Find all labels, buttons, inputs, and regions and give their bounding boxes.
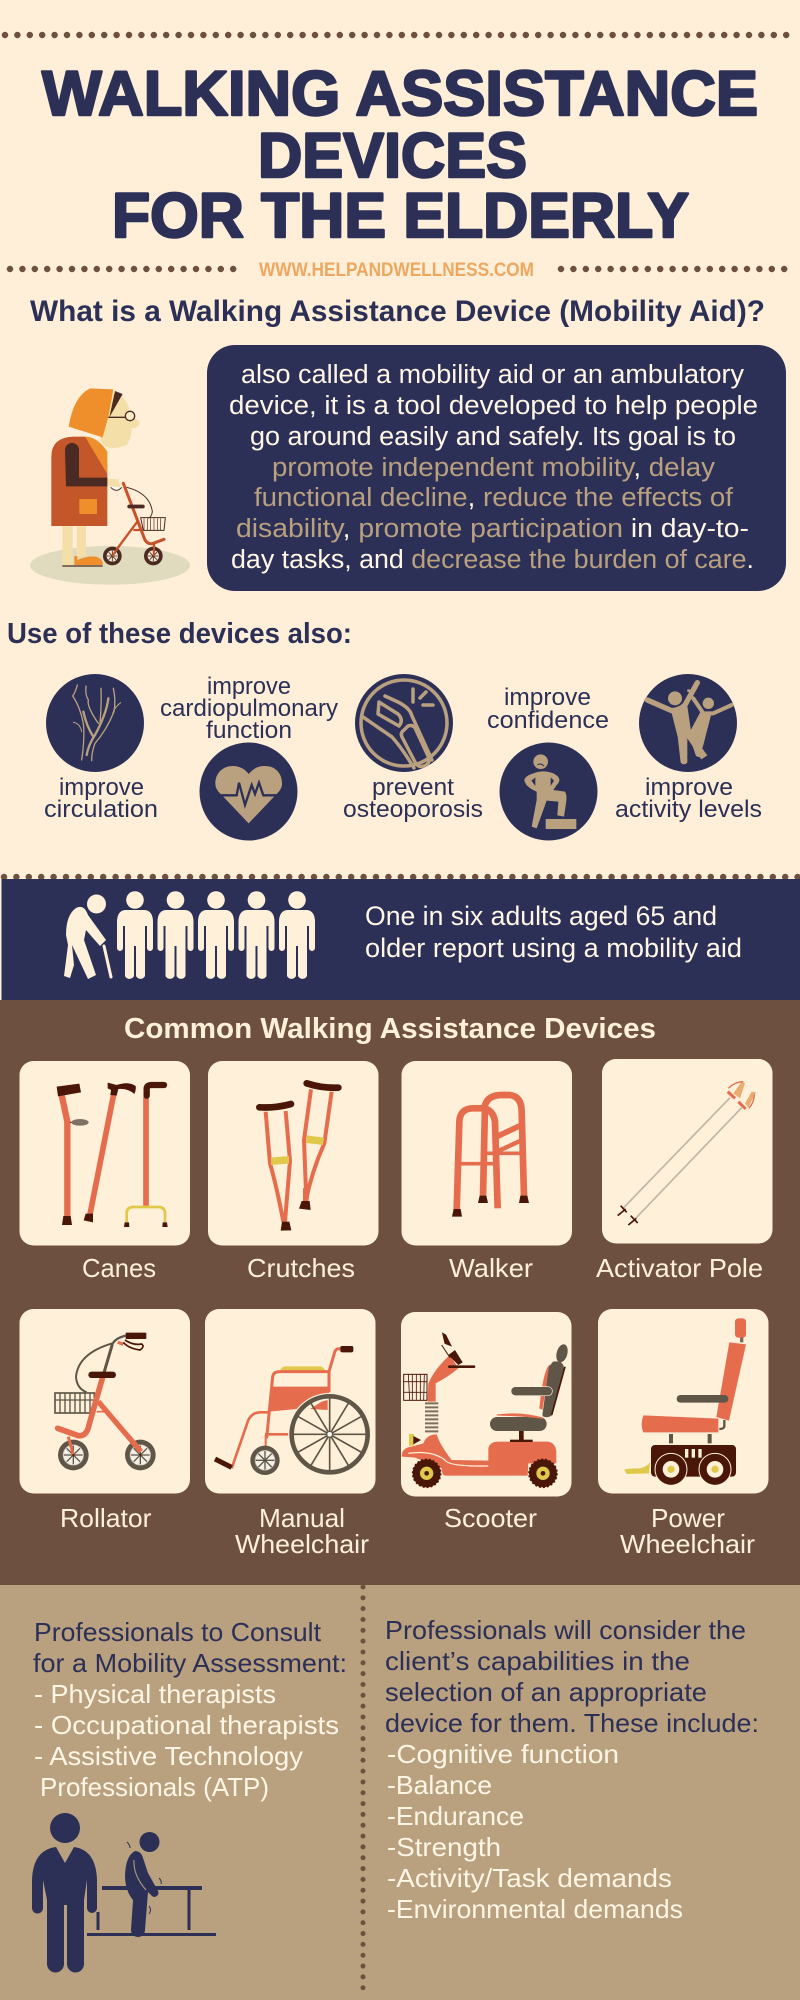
statistic text: [365, 901, 742, 963]
label: improve activity levels: activity levels: [615, 796, 762, 823]
label: power wheelchair: [620, 1503, 755, 1559]
card: canes: [20, 1061, 190, 1246]
card: rollator: [20, 1309, 190, 1494]
text: professionals will consider: -Balance: [387, 1770, 492, 1800]
text: professionals to consult: for a Mobility Assessment:: [33, 1648, 347, 1678]
label: prevent osteoporosis: osteoporosis: [343, 796, 483, 823]
card: scooter: [401, 1312, 572, 1496]
icon: dancing people: [639, 674, 737, 772]
panel: definition: go around easily and safely. Its goal is to: [250, 423, 736, 451]
text: professionals will consider: -Endurance: [387, 1801, 524, 1831]
card: walker: [402, 1061, 572, 1246]
label: activator pole: Activator Pole: [596, 1253, 763, 1283]
label: prevent osteoporosis: [343, 774, 483, 823]
icon: improve circulation: [46, 674, 144, 772]
text: professionals will consider: -Cognitive function: [387, 1739, 619, 1769]
label: improve cardiopulmonary function: cardiopulmonary: [160, 695, 338, 722]
label: improve confidence: improve: [504, 684, 591, 711]
statistic text: older report using a mobility aid: [365, 933, 742, 963]
label: improve circulation: circulation: [44, 796, 158, 823]
label: improve confidence: confidence: [487, 707, 609, 734]
label: crutches: Crutches: [247, 1253, 355, 1283]
illustration: elderly woman with rollator: [30, 388, 190, 585]
statistic text: One in six adults aged 65 and: [365, 901, 717, 931]
title: DEVICES: [258, 121, 527, 191]
label: power wheelchair: Power: [651, 1503, 725, 1533]
text: professionals to consult: - Occupational therapists: [34, 1710, 339, 1740]
text: professionals to consult: - Physical therapists: [34, 1679, 276, 1709]
panel: definition: device, it is a tool developed to help people: [229, 392, 758, 420]
text: professionals to consult: Professionals to Consult: [34, 1617, 322, 1647]
label: improve activity levels: [615, 774, 762, 823]
card: activator pole: [602, 1059, 772, 1244]
panel: definition: disability , promote participation in day-to-: [236, 515, 749, 543]
text: professionals will consider: selection of an appropriate: [385, 1677, 707, 1707]
heading: use of these devices: Use of these devices also:: [7, 618, 352, 650]
heading: common walking assistance devices: Common Walking Assistance Devices: [124, 1013, 656, 1045]
panel: definition: promote independent mobility , delay: [272, 454, 715, 482]
label: power wheelchair: Wheelchair: [620, 1529, 755, 1559]
panel: one in six statistic: [2, 879, 800, 1000]
icon: six people, one with cane: [64, 891, 315, 979]
label: manual wheelchair: [235, 1503, 369, 1559]
label: improve circulation: improve: [59, 774, 144, 801]
label: manual wheelchair: Manual: [259, 1503, 345, 1533]
label: improve cardiopulmonary function: function: [206, 717, 292, 744]
icon: therapist and patient: [32, 1813, 216, 1972]
panel: definition: functional decline , reduce the effects of: [254, 484, 734, 512]
text: professionals will consider: -Activity/Task demands: [387, 1863, 672, 1893]
text: professionals will consider: [385, 1615, 759, 1924]
panel: definition: also called a mobility aid or an ambulatory: [241, 361, 744, 389]
text: professionals will consider: -Strength: [387, 1832, 501, 1862]
label: scooter: Scooter: [444, 1503, 537, 1533]
title: WALKING ASSISTANCE: [42, 59, 758, 129]
text: professionals will consider: -Environmental demands: [387, 1894, 683, 1924]
title: FOR THE ELDERLY: [112, 181, 689, 251]
text: professionals to consult: [33, 1617, 347, 1802]
icon: heart with pulse: [200, 742, 298, 840]
card: power wheelchair: [598, 1309, 768, 1494]
panel: definition: day tasks, and decrease the burden of care .: [231, 546, 754, 574]
panel: professionals background: [0, 1585, 800, 2000]
label: manual wheelchair: Wheelchair: [235, 1529, 369, 1559]
text: professionals will consider: Professionals will consider the: [385, 1615, 746, 1645]
text: professionals to consult: Professionals (ATP): [40, 1772, 269, 1802]
card: crutches: [208, 1061, 378, 1246]
icon: person stepping up: [500, 742, 598, 840]
panel: common devices background: [0, 1000, 800, 1585]
text: professionals will consider: device for them. These include:: [385, 1708, 759, 1738]
panel: definition: [207, 345, 786, 591]
label: prevent osteoporosis: prevent: [372, 774, 454, 801]
label: improve confidence: [487, 684, 609, 734]
card: manual wheelchair: [205, 1309, 376, 1494]
title: [42, 59, 758, 251]
label: improve activity levels: improve: [645, 774, 733, 801]
label: canes: Canes: [82, 1253, 156, 1283]
heading: what is a walking assistance device: What is a Walking Assistance Device (Mobility Aid)?: [30, 295, 765, 328]
website url: WWW.HELPANDWELLNESS.COM: [259, 260, 534, 281]
text: professionals to consult: - Assistive Technology: [34, 1741, 303, 1771]
label: improve circulation: [44, 774, 158, 823]
label: improve cardiopulmonary function: [160, 673, 338, 744]
label: walker: Walker: [449, 1253, 533, 1283]
label: rollator: Rollator: [60, 1503, 152, 1533]
label: improve cardiopulmonary function: improve: [207, 673, 291, 700]
icon: knee joint: [355, 674, 453, 772]
text: professionals will consider: client’s capabilities in the: [385, 1646, 690, 1676]
